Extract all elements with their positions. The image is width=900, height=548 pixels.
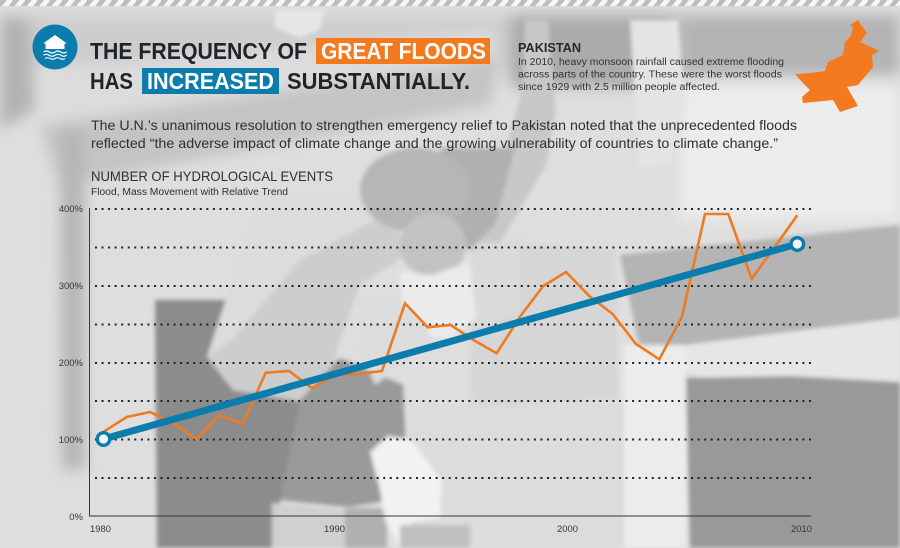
- gridlines: [95, 209, 812, 478]
- child hair: [360, 148, 470, 232]
- adult arm: [470, 235, 520, 330]
- title: [90, 38, 490, 94]
- child shirt and arm: [400, 262, 476, 338]
- standing figure leg: [630, 20, 685, 168]
- title: HAS: [90, 68, 133, 94]
- x-axis labels: 1990: [324, 524, 345, 535]
- text block: Pakistan: [518, 41, 784, 93]
- y-axis labels: 300%: [59, 281, 84, 292]
- icon: flooded house: [32, 24, 78, 70]
- y-axis labels: 200%: [59, 358, 84, 369]
- highlight: great floods: GREAT FLOODS: [321, 38, 486, 64]
- orange line: events: [104, 214, 797, 439]
- highlight: increased: INCREASED: [147, 68, 274, 94]
- lower right dark wall: [686, 376, 900, 548]
- bright column: [624, 345, 686, 548]
- text block: Pakistan: PAKISTAN: [518, 41, 581, 55]
- title: THE FREQUENCY OF: [90, 38, 307, 64]
- text block: Pakistan: In 2010, heavy monsoon rainfall caused extreme flooding: [518, 57, 784, 68]
- brick wall: [620, 225, 900, 350]
- icon: map of Pakistan: [795, 20, 879, 112]
- child face: [400, 213, 466, 277]
- text block: Pakistan: across parts of the country. These were the worst floods: [518, 70, 782, 80]
- x-axis labels: 2010: [791, 524, 812, 535]
- y-axis labels: 400%: [59, 204, 84, 215]
- chart heading: NUMBER OF HYDROLOGICAL EVENTS: [91, 168, 333, 184]
- torso: [207, 190, 402, 403]
- title: SUBSTANTIALLY.: [287, 68, 470, 94]
- text block: U.N. resolution: [91, 117, 797, 151]
- trend start marker: [97, 433, 110, 445]
- text block: Pakistan: since 1929 with 2.5 million people affected.: [518, 82, 720, 93]
- y-axis labels: 0%: [69, 512, 84, 523]
- lower hand: [370, 436, 442, 548]
- line chart: hydrological events: [59, 204, 812, 535]
- shorts: [280, 358, 408, 507]
- text block: U.N. resolution: reflected “the adverse impact of climate change and the growing vulnerability of countries to climate change.”: [91, 135, 778, 151]
- legs: [272, 503, 345, 548]
- y-axis labels: 100%: [59, 435, 84, 446]
- dark doorway: [155, 300, 310, 548]
- chart heading: Flood, Mass Movement with Relative Trend: [91, 187, 288, 198]
- axes: [90, 208, 811, 516]
- y-axis labels: [59, 204, 84, 523]
- upper hand: [275, 10, 325, 38]
- background behind child: [440, 148, 515, 250]
- x-axis labels: 2000: [557, 524, 578, 535]
- blue line: trend: [104, 244, 797, 439]
- x-axis labels: [90, 524, 812, 535]
- text block: U.N. resolution: The U.N.’s unanimous resolution to strengthen emergency relief to Pakistan noted that the unprecedented floods: [91, 117, 797, 133]
- panel: [470, 240, 618, 408]
- chart heading: [91, 168, 333, 198]
- x-axis labels: 1980: [90, 524, 111, 535]
- trend end marker: [791, 238, 804, 250]
- top hatched stripe: [0, 0, 900, 6]
